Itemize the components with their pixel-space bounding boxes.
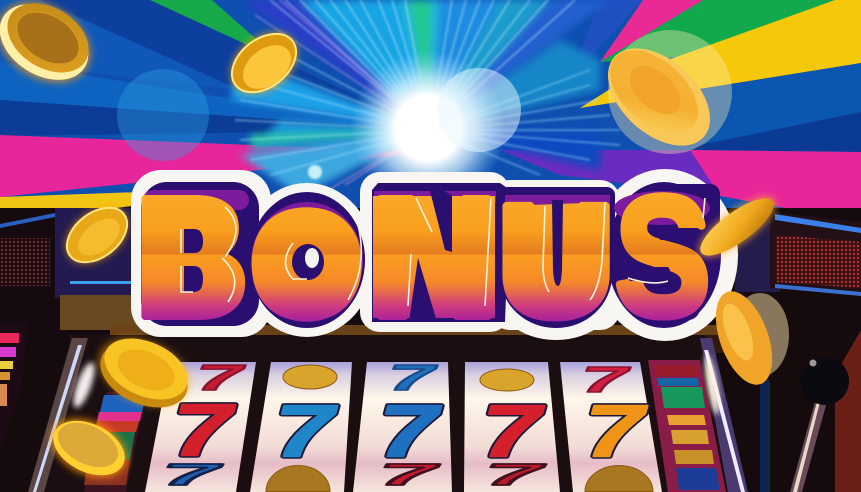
orange letters: O xyxy=(250,182,364,348)
top row sevens xyxy=(196,357,630,400)
magenta bevel xyxy=(143,190,710,322)
coin top right xyxy=(590,29,728,165)
dark purple extrusion xyxy=(141,182,721,328)
orange letters: U xyxy=(497,172,616,350)
coin top left xyxy=(0,0,105,99)
bottom row sevens xyxy=(162,458,546,492)
coin lower right xyxy=(705,284,789,392)
middle row sevens: 7 xyxy=(585,390,647,472)
middle row sevens xyxy=(173,389,647,472)
reel 4 xyxy=(464,362,560,492)
reel 5 xyxy=(560,362,662,492)
BONUS title xyxy=(131,162,738,353)
orange letters: S xyxy=(615,162,710,352)
letter detail: dark counters xyxy=(184,183,701,322)
reel 2 xyxy=(250,362,352,492)
background: light rays xyxy=(235,0,620,195)
background: blurred ray fan xyxy=(230,0,610,195)
coin right of title xyxy=(690,187,784,267)
background: colour bands xyxy=(0,0,861,240)
middle row sevens: 7 xyxy=(275,390,337,472)
reel symbols: sevens xyxy=(162,357,647,492)
left side lights panel xyxy=(0,322,28,450)
coin top centre xyxy=(219,20,309,106)
right pay table xyxy=(648,360,726,492)
middle row sevens: 7 xyxy=(379,390,441,472)
slot machine cabinet xyxy=(0,205,861,492)
lever xyxy=(790,357,849,492)
top row sevens: 7 xyxy=(196,357,245,398)
top row sevens: 7 xyxy=(388,357,437,398)
coin bottom left xyxy=(42,407,136,489)
reel 1 xyxy=(145,362,256,492)
lens flare bubbles xyxy=(117,30,732,179)
letter detail: filled interiors xyxy=(165,196,585,318)
orange letters: B xyxy=(134,162,249,352)
middle row sevens: 7 xyxy=(482,390,544,472)
coin left of title xyxy=(55,195,139,275)
reel symbols: coins xyxy=(266,365,653,492)
bottom row sevens: 7 xyxy=(485,458,546,492)
coin over first reel xyxy=(88,324,200,420)
middle row sevens: 7 xyxy=(585,390,647,472)
bottom row sevens: 7 xyxy=(162,458,223,492)
middle row sevens: 7 xyxy=(482,390,544,472)
left pay table xyxy=(84,392,146,492)
reels window xyxy=(28,335,748,492)
light burst xyxy=(350,50,506,206)
bottom row sevens: 7 xyxy=(379,458,440,492)
middle row sevens: 7 xyxy=(379,390,441,472)
letter detail: white highlights xyxy=(181,198,705,306)
orange letters xyxy=(134,162,710,353)
orange letters: N xyxy=(369,163,500,353)
middle row sevens: 7 xyxy=(173,389,235,471)
white sticker backing xyxy=(131,169,738,341)
middle row sevens: 7 xyxy=(275,390,337,472)
reel 3 xyxy=(353,362,452,492)
middle row sevens: 7 xyxy=(173,389,235,471)
top row sevens: 7 xyxy=(581,359,630,400)
